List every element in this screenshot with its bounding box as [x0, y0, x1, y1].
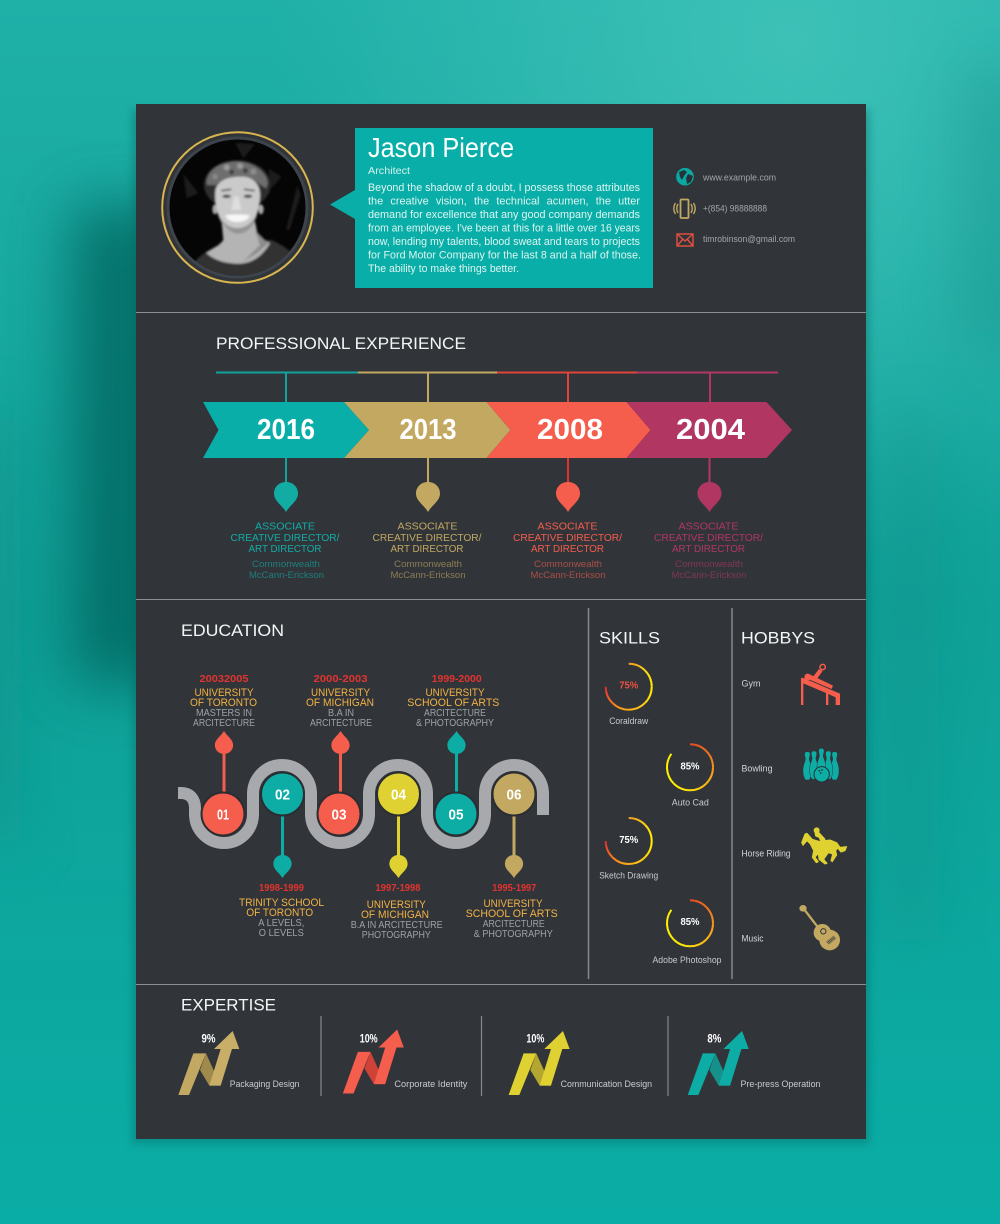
metric: communication design: Communication Design	[561, 1079, 652, 1089]
stop 02: 02	[275, 788, 290, 804]
stop 03	[306, 674, 374, 836]
job: 2004: Commonwealth	[675, 558, 743, 569]
job: 2013: CREATIVE DIRECTOR/	[372, 533, 482, 544]
stop 06: 06	[506, 788, 522, 804]
job: 2004	[654, 458, 763, 580]
job: 2008: CREATIVE DIRECTOR/	[513, 533, 622, 544]
stop 06: & PHOTOGRAPHY	[474, 929, 553, 940]
metric: communication design	[509, 1031, 652, 1095]
stop 05: 1999-2000	[432, 674, 482, 685]
website: www.example.com	[702, 172, 776, 182]
job: 2016: Commonwealth	[252, 558, 320, 569]
top connector lines	[216, 372, 778, 402]
stop 02: A LEVELS,	[258, 918, 304, 929]
skill: Adobe Photoshop	[652, 900, 722, 965]
job: 2008: ASSOCIATE	[538, 522, 598, 532]
stop 01: ARCITECTURE	[193, 718, 255, 729]
metric: packaging design: Packaging Design	[230, 1079, 300, 1089]
education heading: EDUCATION	[181, 621, 284, 640]
stop 05: SCHOOL OF ARTS	[407, 697, 499, 709]
icon: gym	[801, 664, 840, 705]
stop 02: TRINITY SCHOOL	[239, 897, 324, 909]
job: 2013	[372, 458, 482, 580]
job: 2013: ART DIRECTOR	[390, 544, 464, 555]
job: 2008: ART DIRECTOR	[531, 544, 604, 555]
name: Jason Pierce	[368, 132, 514, 163]
stop 06	[466, 772, 558, 940]
stop 02: O LEVELS	[259, 928, 304, 939]
stop 04: 04	[391, 788, 406, 804]
skill: Sketch Drawing: 75%	[619, 834, 639, 846]
metric: corporate identity	[343, 1029, 468, 1093]
chevron: 2013: 2013	[400, 414, 456, 446]
stop 03: UNIVERSITY	[311, 687, 370, 699]
stop 03: 2000-2003	[314, 674, 368, 685]
stop 01	[190, 674, 257, 836]
chevron: 2013	[344, 402, 510, 458]
resume panel	[136, 104, 866, 1139]
stop 04: B.A IN ARCITECTURE	[351, 920, 443, 931]
chevron: 2016	[203, 402, 369, 458]
stop 04	[351, 772, 443, 941]
skill: Adobe Photoshop: Adobe Photoshop	[652, 955, 722, 965]
stop 01: OF TORONTO	[190, 697, 257, 709]
icon: mail	[677, 234, 693, 246]
hobbys heading: HOBBYS	[741, 628, 815, 648]
stop 02: OF TORONTO	[246, 907, 313, 919]
job: 2016	[230, 458, 340, 580]
stop 03: ARCITECTURE	[310, 718, 372, 729]
chevron: 2008	[486, 402, 650, 458]
icon: horse rider	[802, 828, 847, 864]
skill: Sketch Drawing	[599, 818, 658, 880]
timeline	[203, 372, 792, 580]
metric: packaging design: 9%	[202, 1034, 216, 1046]
biography: the creative vision, the technical acumen, the utter	[368, 196, 640, 208]
metric: communication design: 10%	[526, 1034, 544, 1046]
job: 2004: McCann-Erickson	[672, 569, 746, 580]
biography: demand for excellence that any good company demands	[368, 209, 640, 221]
stop 06: UNIVERSITY	[484, 898, 542, 910]
hobbies panel	[741, 628, 847, 950]
biography	[368, 182, 641, 275]
job: 2004: CREATIVE DIRECTOR/	[654, 533, 763, 544]
metric: pre-press operation: 8%	[707, 1034, 721, 1046]
icon: bowling	[803, 748, 839, 782]
job: 2013: McCann-Erickson	[390, 569, 466, 580]
stop 05	[407, 674, 499, 836]
job title: Architect	[368, 165, 410, 177]
stop 01: UNIVERSITY	[194, 687, 254, 699]
stop 05: & PHOTOGRAPHY	[416, 718, 494, 729]
stop 01: 20032005	[200, 674, 249, 685]
job: 2008: Commonwealth	[534, 558, 602, 569]
stop 04: UNIVERSITY	[367, 899, 426, 911]
icon: globe	[676, 168, 694, 186]
stop 04: PHOTOGRAPHY	[362, 930, 431, 941]
biography: The ability to make things better.	[368, 263, 519, 275]
education road chart	[178, 674, 558, 941]
chevron: 2016: 2016	[257, 414, 315, 446]
winding road	[178, 765, 543, 843]
job: 2016: ART DIRECTOR	[248, 544, 322, 555]
job: 2016: ASSOCIATE	[255, 522, 315, 532]
skill: Coraldraw: 75%	[619, 680, 639, 692]
stop 03: B.A IN	[328, 708, 354, 719]
metric: packaging design	[178, 1031, 300, 1095]
icon: phone	[674, 200, 695, 218]
professional experience heading: PROFESSIONAL EXPERIENCE	[216, 334, 466, 353]
stop 05: UNIVERSITY	[426, 687, 484, 699]
biography: for Ford Motor Company for the last 8 and a half of those.	[368, 250, 641, 262]
hobby label: horse riding: Horse Riding	[742, 849, 790, 859]
stop 03: OF MICHIGAN	[306, 697, 374, 709]
skill: Auto Cad	[667, 744, 713, 807]
job: 2016: CREATIVE DIRECTOR/	[230, 533, 340, 544]
job: 2004: ASSOCIATE	[678, 522, 739, 532]
stop 01: MASTERS IN	[196, 708, 252, 719]
icon: guitar	[799, 905, 840, 950]
stop 06: SCHOOL OF ARTS	[466, 908, 558, 920]
metric: pre-press operation: Pre-press Operation	[740, 1079, 820, 1089]
skill: Sketch Drawing: Sketch Drawing	[599, 870, 658, 880]
callout box	[330, 128, 653, 288]
column dividers	[588, 608, 732, 979]
hobby label: music: Music	[742, 934, 764, 944]
stop 02: 1998-1999	[259, 883, 304, 894]
expertise dividers	[321, 1016, 668, 1096]
skill: Coraldraw	[606, 664, 652, 726]
stop 05: 05	[448, 808, 464, 824]
skill: Auto Cad: Auto Cad	[672, 797, 709, 807]
stop 04: OF MICHIGAN	[361, 909, 429, 921]
bio callout	[330, 128, 653, 288]
stop 06: 1995-1997	[492, 883, 537, 894]
stop 02	[239, 772, 324, 939]
skills heading: SKILLS	[599, 628, 660, 648]
phone number: +(854) 98888888	[703, 204, 767, 214]
chevron: 2008: 2008	[537, 414, 603, 446]
chevron: 2004: 2004	[676, 414, 745, 446]
stop 04: 1997-1998	[376, 883, 421, 894]
hobby label: bowling: Bowling	[742, 764, 772, 774]
job: 2016: McCann-Erickson	[249, 569, 324, 580]
skill: Auto Cad: 85%	[680, 760, 700, 772]
stop 05: ARCITECTURE	[424, 708, 486, 719]
chevron: 2004	[626, 402, 792, 458]
metric: pre-press operation	[688, 1031, 820, 1095]
job: 2013: Commonwealth	[394, 558, 462, 569]
job: 2004: ART DIRECTOR	[672, 544, 745, 555]
job: 2008: McCann-Erickson	[530, 569, 606, 580]
skills panel	[599, 628, 722, 965]
skill: Adobe Photoshop: 85%	[680, 916, 700, 928]
expertise heading: EXPERTISE	[181, 996, 276, 1014]
hobby label: gym: Gym	[742, 678, 761, 688]
expertise chart	[178, 1029, 820, 1095]
stop 06: ARCITECTURE	[483, 919, 545, 930]
profile photo	[162, 132, 313, 283]
contact details	[674, 168, 795, 246]
skill: Coraldraw: Coraldraw	[609, 716, 649, 726]
email: timrobinson@gmail.com	[703, 234, 795, 244]
stop 03: 03	[332, 808, 346, 824]
biography: Beyond the shadow of a doubt, I possess those attributes	[368, 182, 640, 194]
biography: now, lending my talents, blood sweat and tears to projects	[368, 236, 640, 248]
biography: from an employee. I've been at this for a little over 16 years	[368, 222, 640, 234]
metric: corporate identity: Corporate Identity	[394, 1079, 468, 1089]
job: 2013: ASSOCIATE	[398, 522, 458, 532]
metric: corporate identity: 10%	[360, 1034, 378, 1046]
job: 2008	[513, 458, 622, 580]
section dividers	[136, 312, 866, 984]
stop 01: 01	[217, 808, 229, 824]
